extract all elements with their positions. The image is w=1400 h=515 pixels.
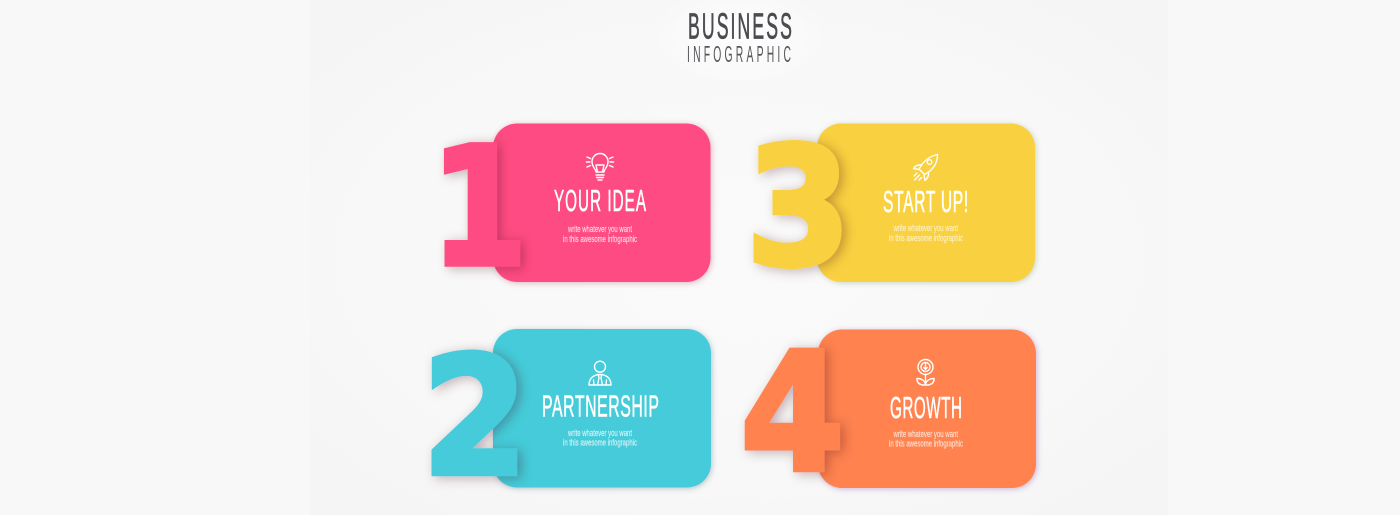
panel 1: your idea <box>430 112 710 303</box>
title halo <box>650 0 830 85</box>
heading: growth: GROWTH <box>890 391 962 426</box>
description: write whatever you want <box>893 429 958 439</box>
card 1 background <box>493 124 710 282</box>
heading: start up: START UP! <box>883 186 968 220</box>
icon: flower with coin <box>917 360 934 385</box>
description: in this awesome infographic <box>889 438 963 448</box>
description: in this awesome infographic <box>889 233 963 243</box>
heading: your idea: YOUR IDEA <box>554 184 647 219</box>
numeral 1: 1 <box>430 112 528 303</box>
background panel <box>310 0 1168 515</box>
numeral 2: 2 <box>422 322 528 513</box>
title: INFOGRAPHIC <box>687 41 791 67</box>
heading: partnership: PARTNERSHIP <box>542 390 659 424</box>
description: in this awesome infographic <box>563 234 637 244</box>
card 4 background <box>818 330 1036 488</box>
description: write whatever you want <box>567 428 632 438</box>
title: BUSINESS <box>688 7 792 47</box>
description: write whatever you want <box>567 224 632 234</box>
panel 4: growth <box>740 318 1036 508</box>
card 2 background <box>493 329 711 488</box>
numeral 3: 3 <box>746 113 851 303</box>
numeral 4: 4 <box>740 318 844 508</box>
icon: rocket <box>914 154 938 180</box>
description <box>563 428 637 448</box>
title <box>687 7 792 67</box>
icon: light bulb <box>586 154 614 180</box>
card 3 background <box>817 124 1035 282</box>
description <box>563 224 637 244</box>
panel 3: start up <box>746 113 1035 303</box>
description <box>889 429 963 448</box>
description <box>889 223 963 243</box>
description: in this awesome infographic <box>563 438 637 448</box>
panel 2: partnership <box>422 322 711 513</box>
description: write whatever you want <box>893 223 958 233</box>
icon: person <box>589 361 611 385</box>
